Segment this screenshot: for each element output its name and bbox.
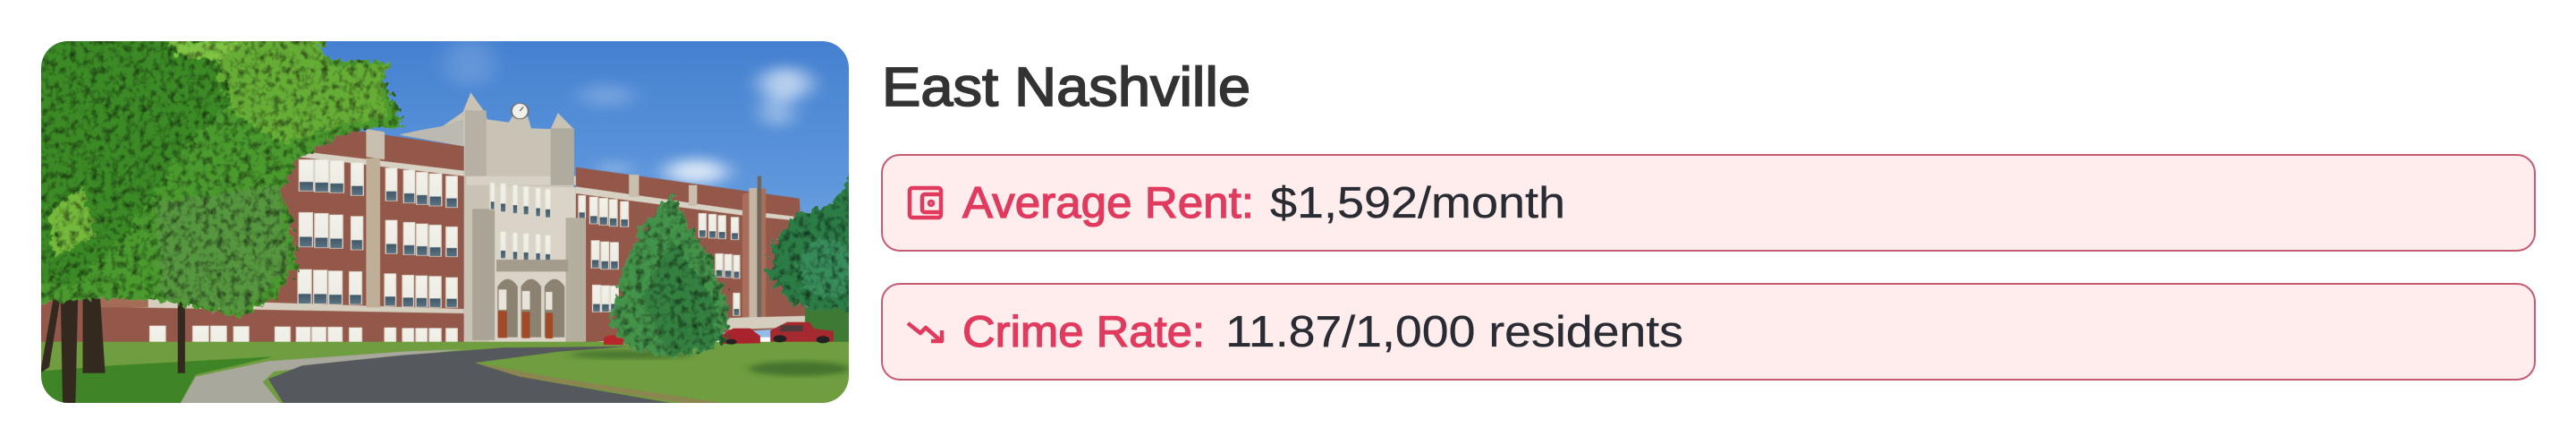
crime panel box — [882, 284, 2535, 380]
tree at right edge — [768, 170, 855, 311]
rent label: Average Rent: — [962, 179, 1254, 227]
large leafy tree at left — [28, 36, 405, 318]
sky with clouds — [34, 39, 860, 338]
icon: wallet — [910, 188, 941, 218]
photo: East Nashville high school building — [28, 36, 860, 407]
icon: trending down arrow — [908, 323, 942, 341]
panel: crime rate — [882, 284, 2535, 380]
school: right brick wing — [576, 167, 808, 343]
window rows — [150, 159, 457, 362]
school: left brick wing — [41, 129, 464, 342]
panel: average rent — [882, 155, 2535, 251]
heading: East Nashville: East Nashville — [882, 56, 1250, 117]
crime label: Crime Rate: — [962, 308, 1205, 356]
tree trunks — [41, 296, 185, 403]
conifer in front of school — [610, 191, 730, 356]
crime value: 11.87/1,000 residents — [1225, 308, 1683, 356]
lawn, road and sidewalk — [34, 307, 860, 407]
rent value: $1,592/month — [1270, 179, 1565, 227]
parked red cars — [604, 322, 834, 345]
school: central limestone tower with clock — [400, 92, 586, 347]
rent panel box — [882, 155, 2535, 251]
